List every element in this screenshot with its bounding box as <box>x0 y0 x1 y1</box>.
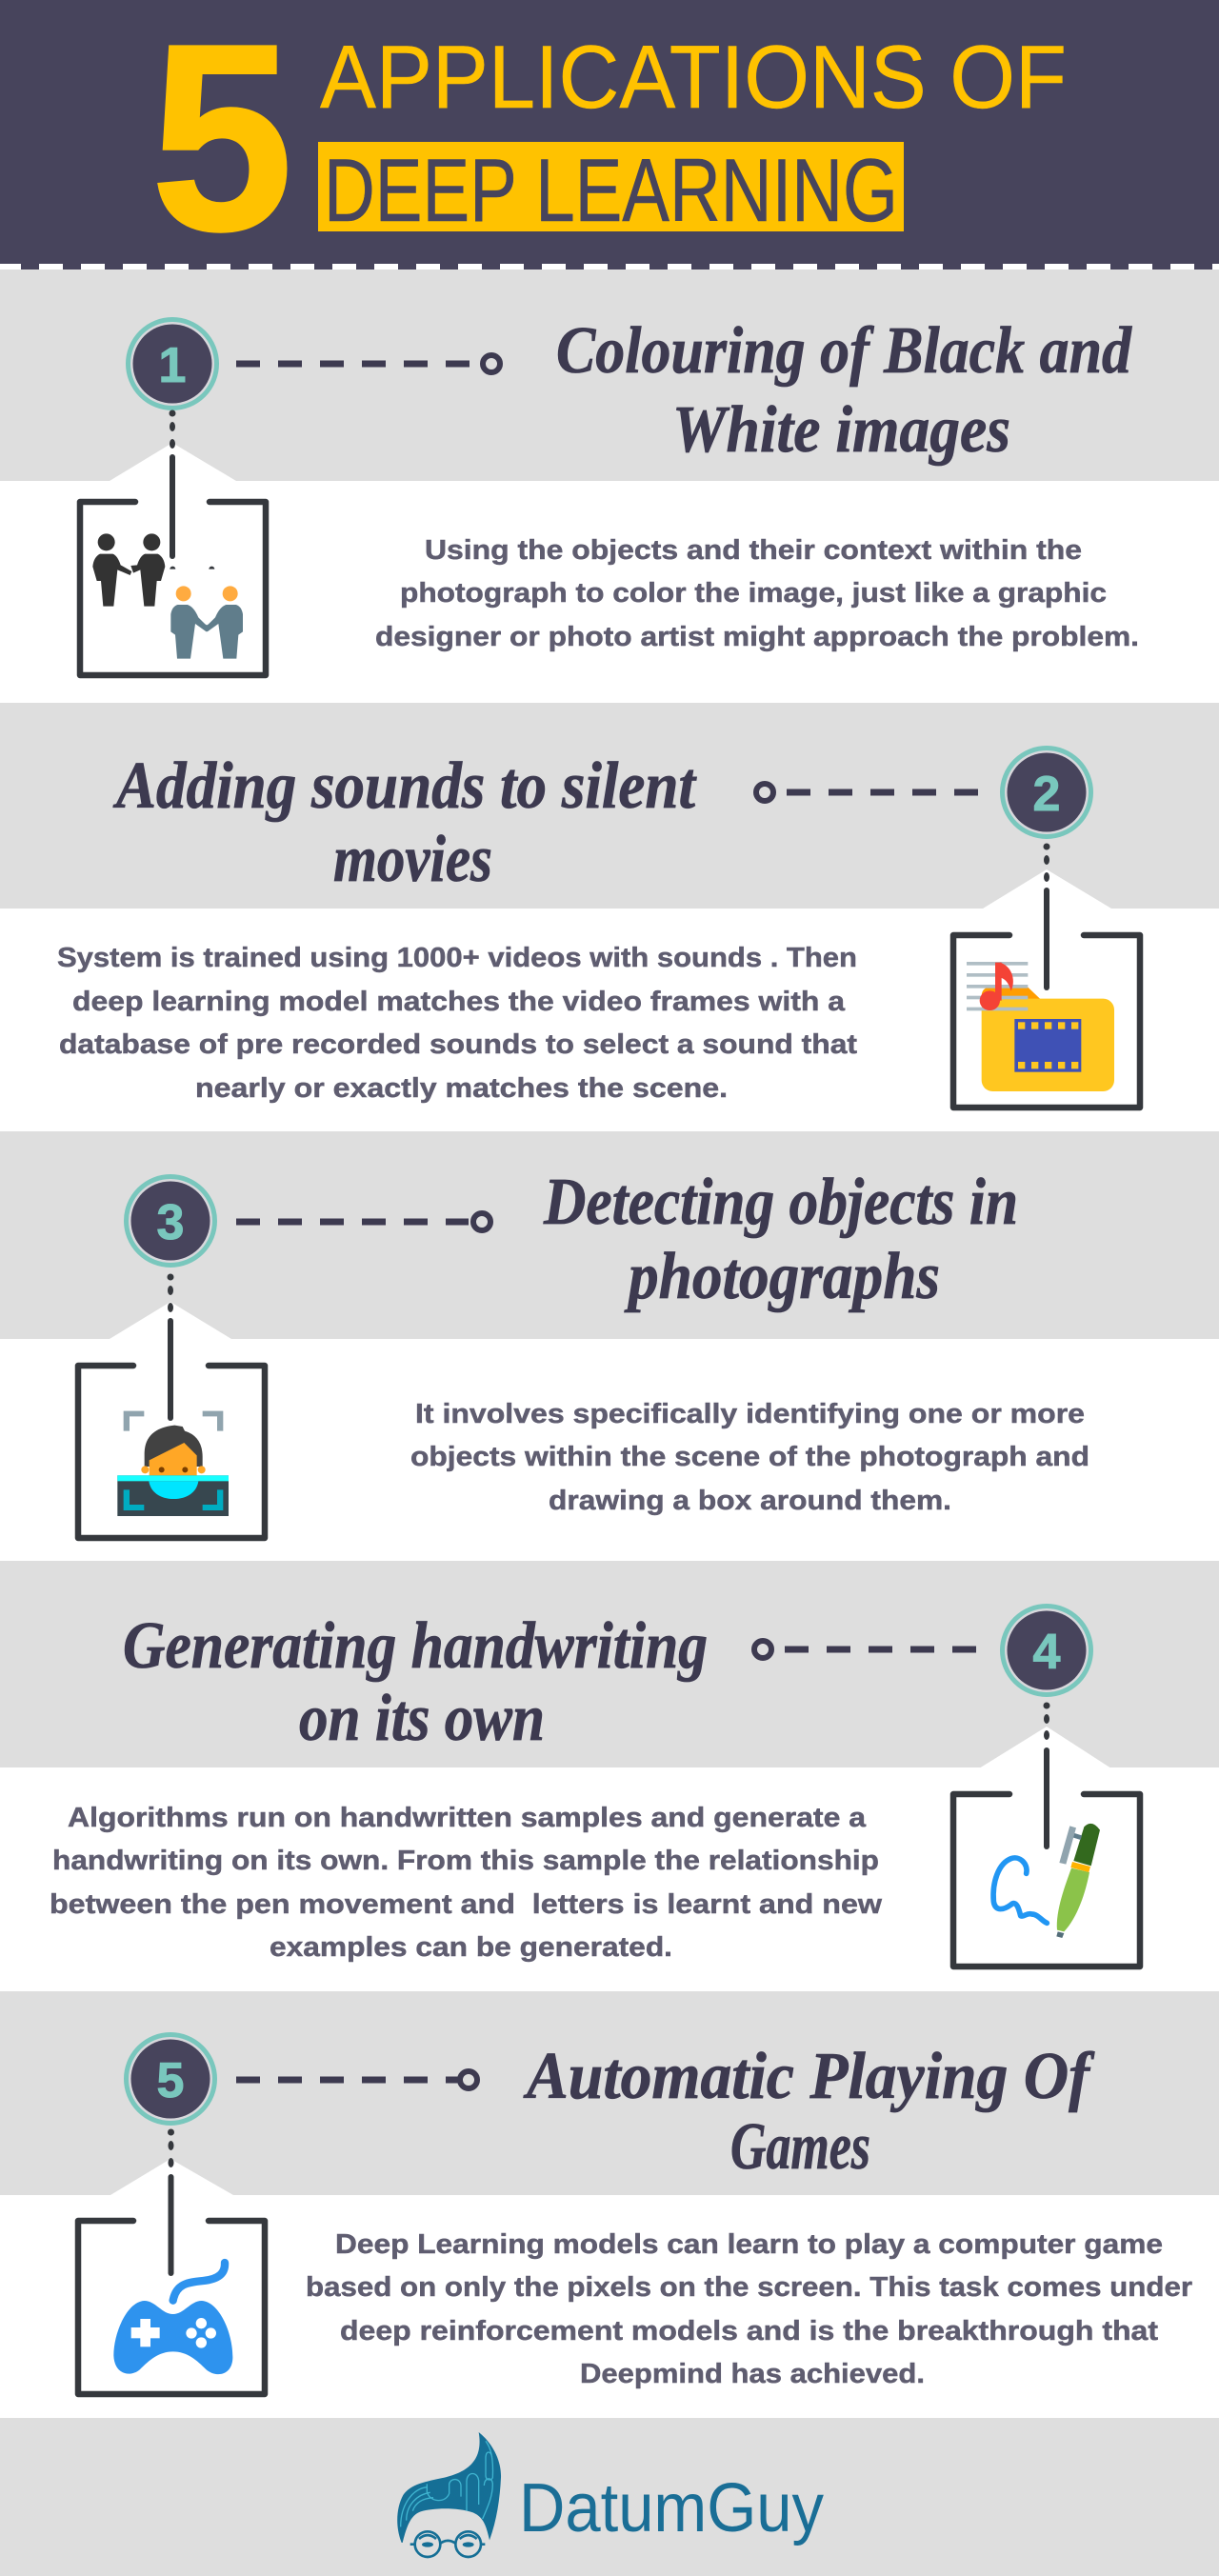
description 1 <box>375 535 1139 652</box>
heading 2 <box>112 749 697 896</box>
panel 5: automatic playing of games <box>0 1991 1219 2394</box>
number badge 1: 1 <box>159 338 186 393</box>
description 1: designer or photo artist might approach the problem. <box>375 622 1139 652</box>
heading 3: Detecting objects in <box>543 1166 1018 1239</box>
dashed connector 4 <box>754 1641 976 1658</box>
panel 4: generating handwriting on its own <box>0 1561 1219 1967</box>
heading 5: Games <box>730 2110 870 2184</box>
description 3: objects within the scene of the photograph and <box>410 1442 1089 1472</box>
description 5: Deepmind has achieved. <box>580 2359 925 2389</box>
panel 2: adding sounds to silent movies <box>0 703 1219 1108</box>
heading 3: photographs <box>624 1240 940 1313</box>
description 2: database of pre recorded sounds to select a sound that <box>59 1029 857 1060</box>
heading 1: Colouring of Black and <box>556 314 1132 388</box>
description 4: examples can be generated. <box>270 1932 672 1963</box>
description 2: deep learning model matches the video frames with a <box>72 987 846 1017</box>
heading 5: Automatic Playing Of <box>523 2040 1095 2113</box>
dashed connector 5 <box>236 2071 477 2088</box>
icon: music and film folder <box>967 962 1114 1091</box>
description 3 <box>410 1399 1089 1516</box>
icon: pen and signature <box>993 1824 1100 1938</box>
icon: face scan <box>117 1411 229 1516</box>
number badge 4 <box>1002 1606 1091 1695</box>
heading 4 <box>123 1609 708 1755</box>
panel 3: detecting objects in photographs <box>0 1131 1219 1538</box>
description 4 <box>50 1803 882 1963</box>
description 5: deep reinforcement models and is the breakthrough that <box>340 2316 1158 2346</box>
icon frame 3 <box>78 1274 265 1538</box>
heading 4: Generating handwriting <box>123 1609 708 1683</box>
footer: DatumGuy logo <box>0 2418 1219 2576</box>
number badge 4: 4 <box>1033 1625 1061 1680</box>
logo icon: hair and glasses <box>397 2432 501 2557</box>
description 1: photograph to color the image, just like a graphic <box>400 578 1107 609</box>
icon frame 5 <box>78 2129 265 2394</box>
heading 4: on its own <box>299 1682 545 1755</box>
title line 2 highlighted: DEEP LEARNING <box>324 140 898 240</box>
description 2: nearly or exactly matches the scene. <box>195 1073 728 1104</box>
heading 5 <box>523 2040 1095 2184</box>
heading 2: Adding sounds to silent <box>112 749 697 823</box>
number badge 2: 2 <box>1033 767 1060 822</box>
dashed connector 3 <box>236 1213 490 1230</box>
number badge 1 <box>128 320 217 408</box>
description 1: Using the objects and their context within the <box>425 535 1082 566</box>
icon: people shaking hands <box>92 533 243 659</box>
heading 1: White images <box>672 393 1010 467</box>
description 5 <box>306 2229 1192 2389</box>
heading 1 <box>556 314 1132 467</box>
description 2: System is trained using 1000+ videos with sounds . Then <box>57 943 857 973</box>
description 4: Algorithms run on handwritten samples and generate a <box>68 1803 867 1833</box>
description 3: drawing a box around them. <box>549 1486 951 1516</box>
icon frame 2 <box>953 844 1140 1108</box>
header banner <box>0 0 1219 287</box>
number badge 5 <box>126 2034 215 2124</box>
description 5: based on only the pixels on the screen. This task comes under <box>306 2272 1192 2303</box>
description 2 <box>57 943 857 1104</box>
number badge 3: 3 <box>157 1195 184 1250</box>
description 4: between the pen movement and letters is learnt and new <box>50 1889 882 1920</box>
heading 3 <box>543 1166 1018 1313</box>
number badge 2 <box>1002 749 1091 836</box>
description 5: Deep Learning models can learn to play a computer game <box>335 2229 1163 2260</box>
dashed connector 1 <box>236 355 500 372</box>
icon frame 1 <box>80 409 266 675</box>
number badge 3 <box>126 1177 215 1265</box>
icon frame 4 <box>953 1703 1140 1967</box>
logo wordmark: DatumGuy <box>519 2470 824 2546</box>
icon: game controller <box>113 2263 232 2374</box>
dashed connector 2 <box>756 784 978 801</box>
heading 2: movies <box>333 823 492 896</box>
description 4: handwriting on its own. From this sample the relationship <box>52 1846 879 1876</box>
panel 1: colouring of black and white images <box>0 270 1219 675</box>
number badge 5: 5 <box>157 2053 184 2108</box>
description 3: It involves specifically identifying one or more <box>415 1399 1085 1429</box>
title line 1: APPLICATIONS OF <box>320 27 1067 127</box>
